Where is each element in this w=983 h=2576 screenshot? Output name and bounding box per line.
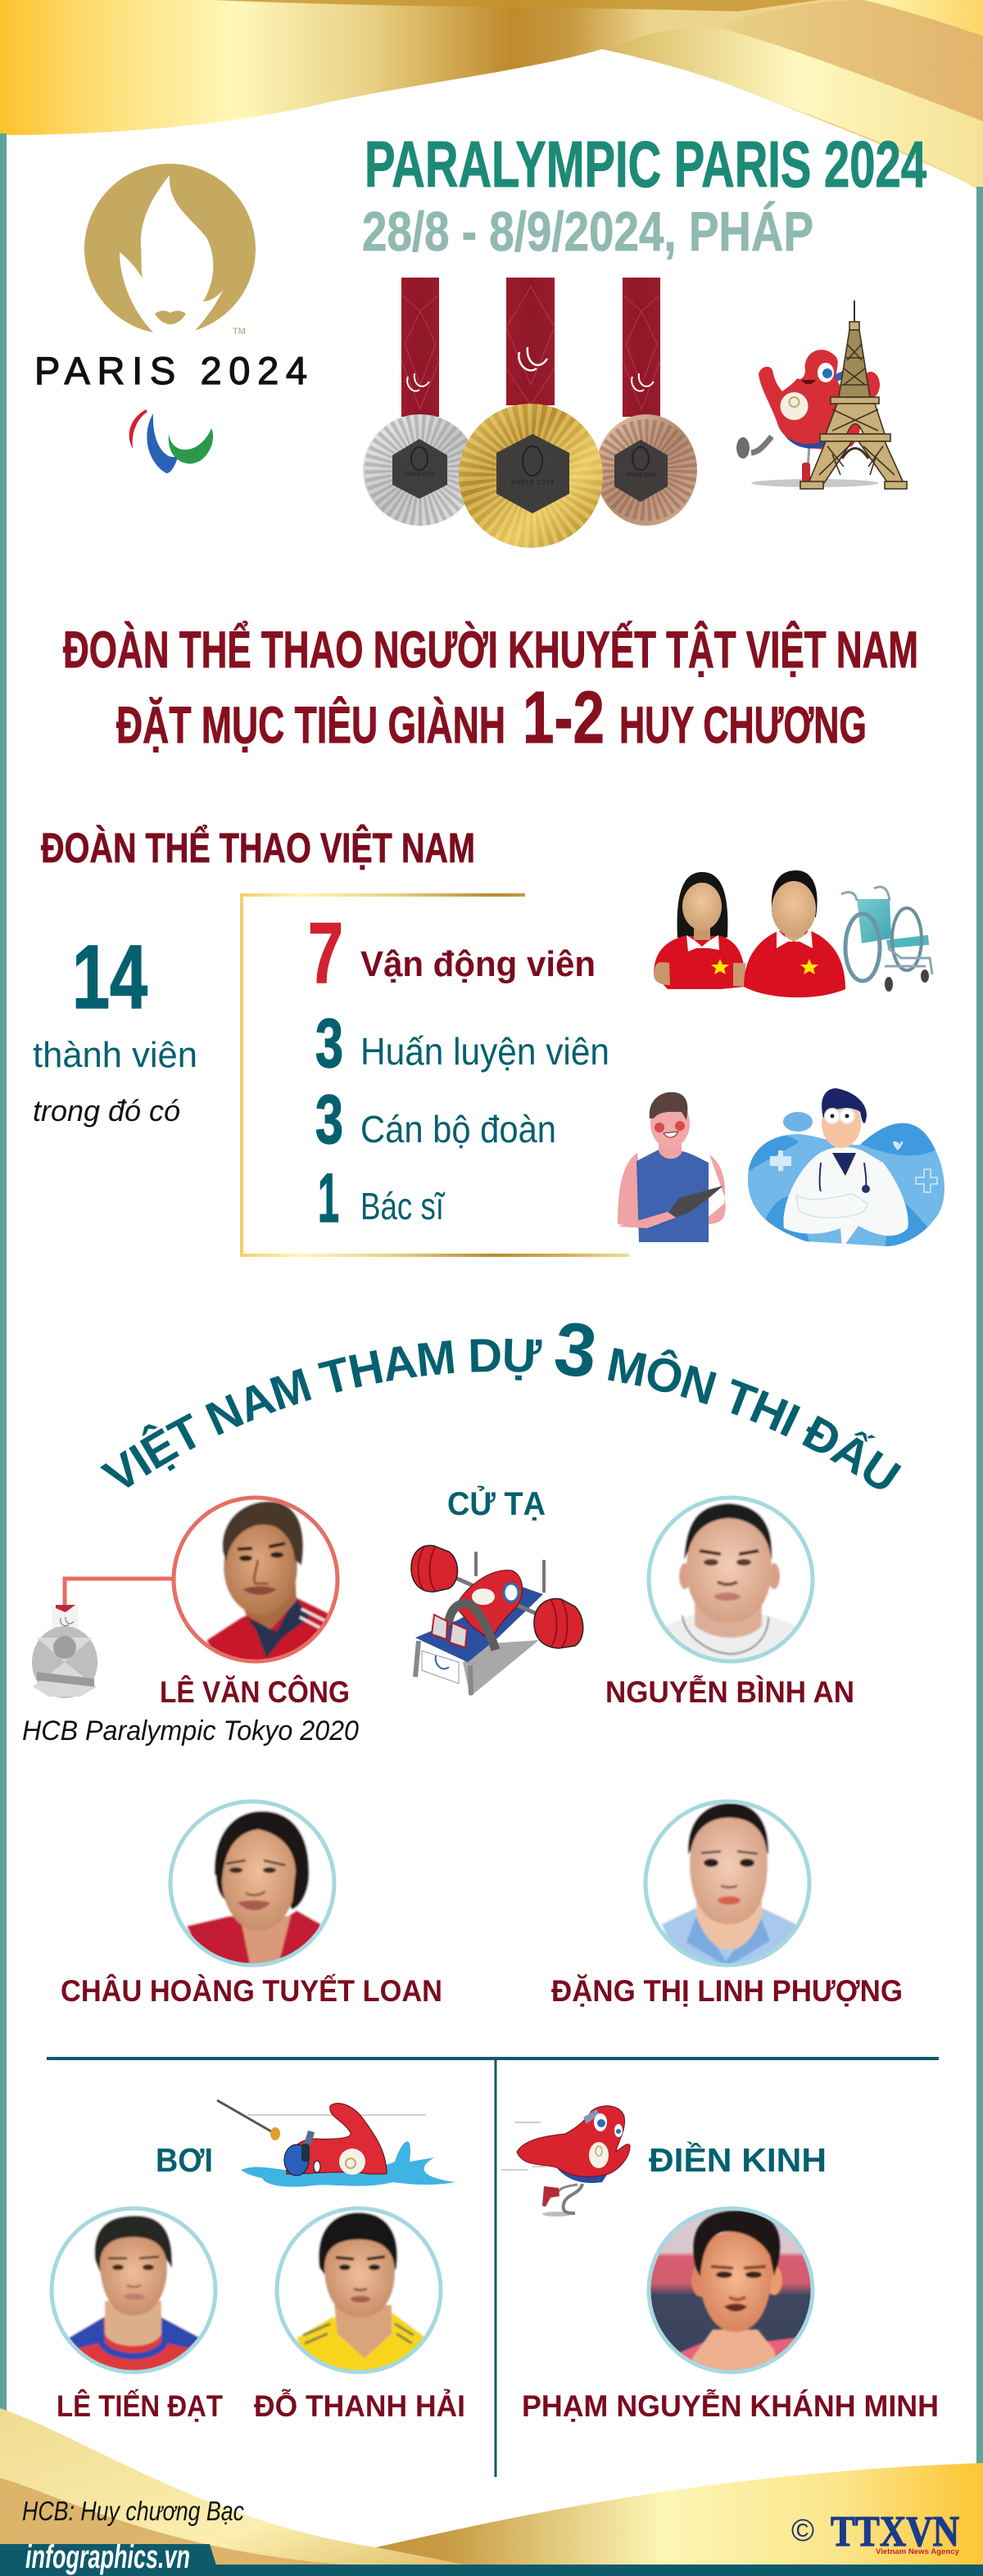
team breakdown list bbox=[308, 906, 609, 1236]
team breakdown list: 3 bbox=[315, 1005, 343, 1082]
weightlifting label: CỬ TẠ bbox=[447, 1485, 546, 1522]
athlete name: Lê Văn Công: LÊ VĂN CÔNG bbox=[160, 1674, 350, 1709]
main heading: HUY CHƯƠNG bbox=[619, 697, 867, 754]
athlete name: Đỗ Thanh Hải: ĐỖ THANH HẢI bbox=[254, 2388, 465, 2423]
gold bracket frame bbox=[242, 895, 629, 1255]
icon: weightlifting mascot bbox=[411, 1545, 583, 1697]
logo text: PARIS 2024 bbox=[34, 349, 307, 392]
gold medal bbox=[459, 278, 603, 548]
logo: TTXVN bbox=[791, 2508, 960, 2556]
note: silver medal at Tokyo: HCB Paralympic Tokyo 2020 bbox=[22, 1715, 359, 1747]
icon: swimming mascot bbox=[217, 2100, 455, 2187]
team total: trong đó có bbox=[33, 1094, 180, 1128]
subtitle: dates: 28/8 - 8/9/2024, PHÁP bbox=[362, 201, 813, 263]
athletics label: ĐIỀN KINH bbox=[649, 2141, 827, 2179]
icon: mascot with Eiffel tower bbox=[736, 301, 907, 489]
portrait: Đỗ Thanh Hải bbox=[276, 2208, 443, 2375]
portrait: Phạm Nguyễn Khánh Minh bbox=[647, 2207, 814, 2379]
icon: paralympic agitos bbox=[129, 409, 213, 473]
footnote: HCB: Huy chương Bạc bbox=[22, 2496, 244, 2526]
curved section heading: VIỆT NAM THAM DỰ 3 MÔN THI ĐẤU bbox=[100, 1323, 901, 1489]
icon: athletes bbox=[654, 870, 845, 997]
divider lines bbox=[47, 2057, 939, 2477]
logo: TTXVN: © bbox=[791, 2514, 814, 2548]
athlete name: Đặng Thị Linh Phượng: ĐẶNG THỊ LINH PHƯỢNG bbox=[551, 1974, 903, 2008]
main heading bbox=[63, 621, 918, 759]
medals bbox=[363, 278, 697, 548]
main heading: ĐẶT MỤC TIÊU GIÀNH bbox=[116, 696, 505, 754]
swimming label: BƠI bbox=[156, 2141, 213, 2179]
team breakdown list: 1 bbox=[318, 1159, 339, 1236]
portrait: Lê Tiến Đạt bbox=[50, 2208, 217, 2375]
portrait: Đặng Thị Linh Phượng bbox=[645, 1801, 812, 1969]
team breakdown list: Cán bộ đoàn bbox=[360, 1108, 556, 1150]
main heading: 1-2 bbox=[523, 677, 605, 759]
athlete name: Phạm Nguyễn Khánh Minh: PHẠM NGUYỄN KHÁNH MINH bbox=[522, 2388, 939, 2423]
silver medal: PARIS 2024 bbox=[404, 472, 435, 477]
team breakdown list: Huấn luyện viên bbox=[360, 1030, 609, 1073]
logo: Paris 2024 emblem bbox=[84, 164, 256, 337]
portrait: Châu Hoàng Tuyết Loan bbox=[170, 1801, 337, 1969]
logo: TTXVN: Vietnam News Agency bbox=[876, 2547, 960, 2556]
team breakdown list: Vận động viên bbox=[360, 944, 596, 984]
team breakdown list: Bác sĩ bbox=[360, 1185, 446, 1227]
portrait: Nguyễn Bình An bbox=[647, 1497, 814, 1664]
team breakdown list: 7 bbox=[308, 906, 343, 1001]
icon: silver medal Tokyo 2020 bbox=[32, 1605, 97, 1698]
logo: Paris 2024 emblem: TM bbox=[233, 327, 246, 337]
icon: running mascot bbox=[501, 2106, 630, 2217]
team total: 14 bbox=[72, 927, 147, 1028]
icon: doctor bbox=[741, 1088, 944, 1249]
team breakdown list: 3 bbox=[315, 1081, 343, 1158]
silver medal bbox=[363, 278, 478, 526]
section heading: team: ĐOÀN THỂ THAO VIỆT NAM bbox=[41, 824, 475, 871]
portrait: Lê Văn Công bbox=[172, 1497, 339, 1670]
team total: thành viên bbox=[33, 1035, 197, 1075]
Eiffel tower bbox=[800, 301, 907, 489]
athlete name: Châu Hoàng Tuyết Loan: CHÂU HOÀNG TUYẾT LOAN bbox=[61, 1973, 442, 2008]
top gold ribbon banner bbox=[0, 0, 983, 193]
bronze medal bbox=[596, 278, 697, 526]
gold medal: PARIS 2024 bbox=[511, 479, 555, 486]
source: infographics.vn: infographics.vn bbox=[25, 2539, 190, 2575]
bronze medal: PARIS 2024 bbox=[626, 472, 656, 478]
team total bbox=[33, 927, 197, 1128]
icon: wheelchair bbox=[841, 887, 932, 992]
logo: TTXVN: TTXVN bbox=[831, 2508, 959, 2556]
bottom gold ribbon footer bbox=[0, 2408, 983, 2576]
connector: medal to portrait bbox=[65, 1579, 174, 1607]
icon: coach bbox=[618, 1092, 726, 1242]
athlete name: Nguyễn Bình An: NGUYỄN BÌNH AN bbox=[605, 1674, 854, 1709]
athlete name: Lê Tiến Đạt: LÊ TIẾN ĐẠT bbox=[57, 2388, 223, 2423]
